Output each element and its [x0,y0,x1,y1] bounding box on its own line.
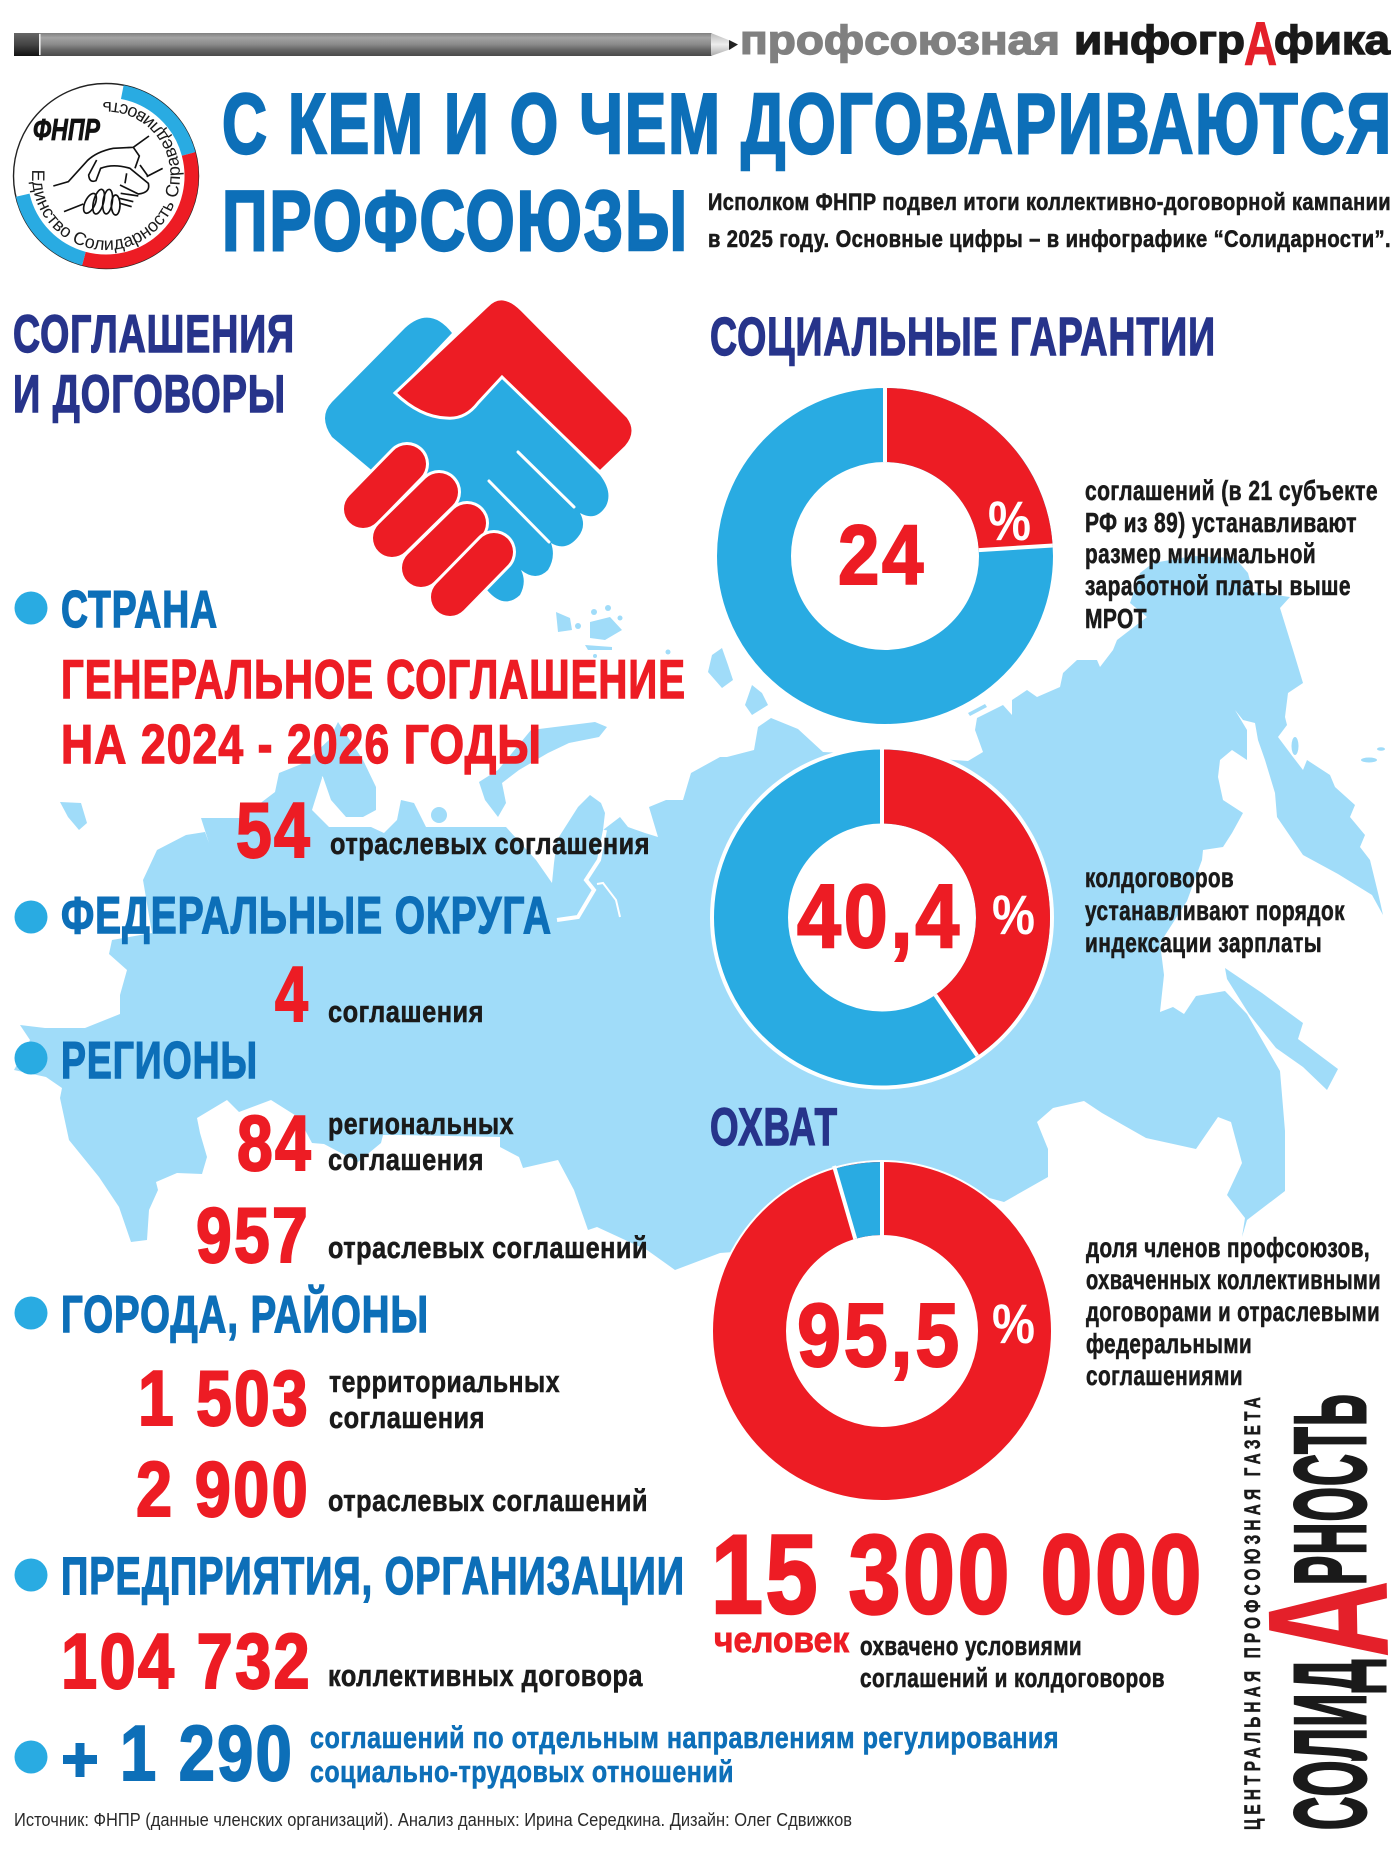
section: предприятия, организации: 104 732 [61,1617,312,1705]
donut chart: 40,4% [710,746,1054,1090]
caption: 40,4%: колдоговоров [1085,862,1234,893]
heading: охват: ОХВАТ [710,1098,838,1157]
header label: профсоюзная: профсоюзная [740,17,1060,63]
logo: ФНПР: Единство Солидарность Справедливость [28,102,184,254]
donut chart: 95,5%: 95,5 [797,1286,962,1386]
logo: ФНПР [12,82,200,270]
stat label: человек: человек [714,1619,850,1660]
text: РНОСТЬ [1275,1393,1387,1585]
source note: Источник: ФНПР (данные членских организаций). Анализ данных: Ирина Середкина. Дизайн: Олег Сдвижков [14,1809,852,1830]
logo: ФНПР: ФНПР [33,112,100,147]
section: города, районы: 2 900 [136,1445,310,1533]
section: города, районы: территориальных [329,1364,560,1399]
header label: инфографика: А [1244,10,1277,78]
donut chart: 24%: % [988,489,1031,552]
section: федеральные округа: 4 [275,950,310,1038]
donut chart: 95,5%: % [992,1292,1035,1355]
section: регионы: 957 [196,1191,310,1279]
heading: соглашения и договоры: СОГЛАШЕНИЯ [13,305,295,364]
section: регионы: соглашения [328,1142,484,1177]
section: регионы [14,1032,648,1279]
section: страна: СТРАНА [61,581,218,639]
stat: 15 300 000: 15 300 000 [711,1512,1204,1637]
pencil header bar [14,33,738,56]
section: страна: ГЕНЕРАЛЬНОЕ СОГЛАШЕНИЕ [61,648,686,710]
stat caption: охвачено условиями [860,1631,1082,1661]
section: города, районы: ГОРОДА, РАЙОНЫ [61,1285,429,1344]
section: регионы: РЕГИОНЫ [61,1032,258,1090]
stat caption [860,1631,1165,1693]
section: регионы: 84 [237,1099,313,1187]
caption: 40,4% [1085,862,1345,958]
donut chart: 40,4%: 40,4 [797,867,962,967]
donut chart: 24%: 24 [838,508,926,602]
caption: 24% [1085,475,1378,634]
section: федеральные округа: соглашения [328,994,484,1029]
section: регионы: отраслевых соглашений [328,1230,648,1265]
additional agreements: + 1 290: социально-трудовых отношений [310,1754,734,1789]
section: страна: 54 [236,786,312,874]
donut chart: 95,5% [711,1160,1053,1502]
caption: 24%: размер минимальной [1085,538,1316,569]
caption: 95,5%: соглашениями [1086,1360,1243,1391]
heading: соглашения и договоры [13,305,295,424]
additional agreements: + 1 290 [14,1709,1059,1797]
section: города, районы: соглашения [329,1400,485,1435]
caption: 95,5%: федеральными [1086,1328,1252,1359]
heading: соглашения и договоры: И ДОГОВОРЫ [13,365,286,424]
section: страна [14,581,686,874]
section: города, районы: отраслевых соглашений [328,1483,648,1518]
section: регионы: региональных [328,1106,514,1141]
newspaper name: Солидарность [1232,1393,1400,1830]
section: предприятия, организации [14,1547,685,1705]
additional agreements: + 1 290: 1 290 [120,1709,294,1797]
header label: инфографика: фика [1274,17,1391,63]
section: города, районы [14,1285,648,1533]
section: предприятия, организации: ПРЕДПРИЯТИЯ, ОРГАНИЗАЦИИ [61,1547,685,1606]
section: федеральные округа: ФЕДЕРАЛЬНЫЕ ОКРУГА [61,887,552,945]
donut chart: 24% [715,386,1055,726]
newspaper name: Солидарность: СОЛИД [1275,1658,1387,1830]
intro text [708,189,1391,253]
caption: 24%: МРОТ [1085,603,1147,634]
additional agreements: + 1 290: соглашений по отдельным направлениям регулирования [310,1720,1059,1755]
section: федеральные округа [14,887,552,1038]
section: города, районы: 1 503 [138,1354,310,1442]
caption: 40,4%: индексации зарплаты [1085,927,1322,958]
icon: handshake [325,299,633,601]
newspaper tagline: ЦЕНТРАЛЬНАЯ ПРОФСОЮЗНАЯ ГАЗЕТА [1240,1393,1265,1830]
section: страна: отраслевых соглашения [330,826,650,861]
map of Russia [14,556,1385,1270]
stat caption: соглашений и колдоговоров [860,1663,1165,1693]
header label: инфографика [1074,10,1391,78]
caption: 95,5% [1086,1232,1381,1391]
donut chart: 40,4%: % [992,883,1035,946]
section: предприятия, организации: коллективных договора [328,1658,643,1693]
title: ПРОФСОЮЗЫ [222,174,689,269]
section: страна: НА 2024 - 2026 ГОДЫ [61,713,542,775]
title [222,77,1393,269]
header label: инфографика: инфогр [1074,17,1245,63]
